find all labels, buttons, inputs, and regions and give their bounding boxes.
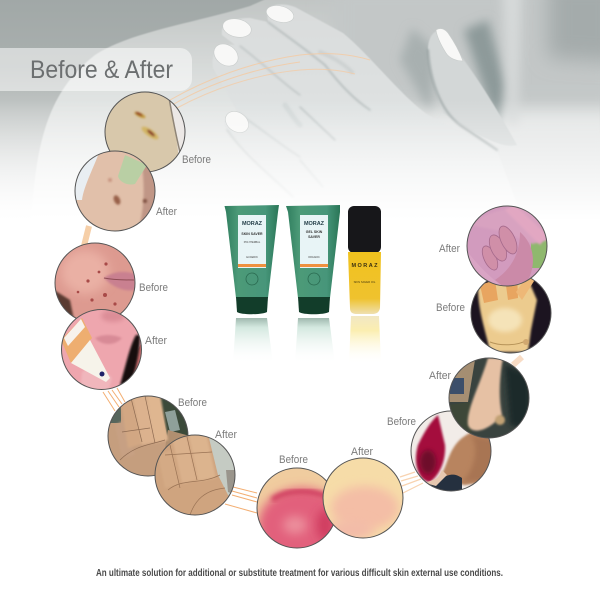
- photo: acne before: [54, 242, 136, 325]
- background photo: hand on shoulder: [0, 0, 600, 192]
- label: before: Before: [178, 397, 207, 409]
- product: gel skin saver tube: SAVER: [308, 235, 320, 239]
- label: after: After: [351, 446, 373, 458]
- product: gel skin saver tube: MORAZ: [304, 221, 325, 227]
- fingers and back of hand: [214, 4, 424, 113]
- product: skin saver oil bottle: SKIN SAVER OIL: [354, 280, 376, 284]
- product: skin saver tube: POLYHERBAL: [244, 241, 261, 244]
- photo: rash before: [256, 468, 334, 548]
- photo: hand wound before: [470, 272, 552, 354]
- fingernails: [210, 3, 463, 137]
- product: gel skin saver tube: ORGANIC: [308, 256, 320, 259]
- product: skin saver oil bottle: MORAZ: [352, 263, 378, 269]
- photo: palm after: [154, 432, 236, 516]
- label: after: After: [429, 370, 451, 382]
- label: before: Before: [436, 302, 465, 314]
- product: skin saver tube: EUCERIN: [246, 256, 258, 259]
- label: after: After: [215, 429, 237, 441]
- photo: rash after: [322, 457, 404, 540]
- product: gel skin saver tube: GEL SKIN: [306, 230, 323, 234]
- thumb: [428, 31, 517, 146]
- heading: Before & After: [30, 56, 173, 84]
- product: skin saver tube: [224, 205, 279, 314]
- orange connecting arcs: [84, 54, 522, 513]
- label: before: Before: [182, 154, 211, 166]
- photo: wound after: [74, 150, 156, 232]
- product reflections: [233, 316, 381, 364]
- label: after: After: [156, 206, 177, 218]
- label: before: Before: [139, 282, 168, 294]
- photo: palm before: [107, 393, 190, 480]
- photo: burn before: [410, 410, 495, 492]
- product: gel skin saver tube: [286, 205, 340, 314]
- label: after: After: [439, 243, 460, 255]
- label: before: Before: [387, 416, 416, 428]
- label: before: Before: [279, 454, 308, 466]
- label banner: [0, 48, 192, 91]
- photo: acne after: [61, 309, 143, 392]
- photo: wound before: [104, 92, 186, 172]
- photo: burn after: [448, 357, 530, 440]
- footer statement: An ultimate solution for additional or substitute treatment for various difficult skin external use conditions.: [96, 568, 503, 579]
- product: skin saver tube: SKIN SAVER: [241, 232, 263, 236]
- product: skin saver tube: MORAZ: [242, 221, 263, 227]
- photo: hand wound after: [466, 205, 549, 288]
- product: skin saver oil bottle: [348, 206, 381, 314]
- label: after: After: [145, 335, 167, 347]
